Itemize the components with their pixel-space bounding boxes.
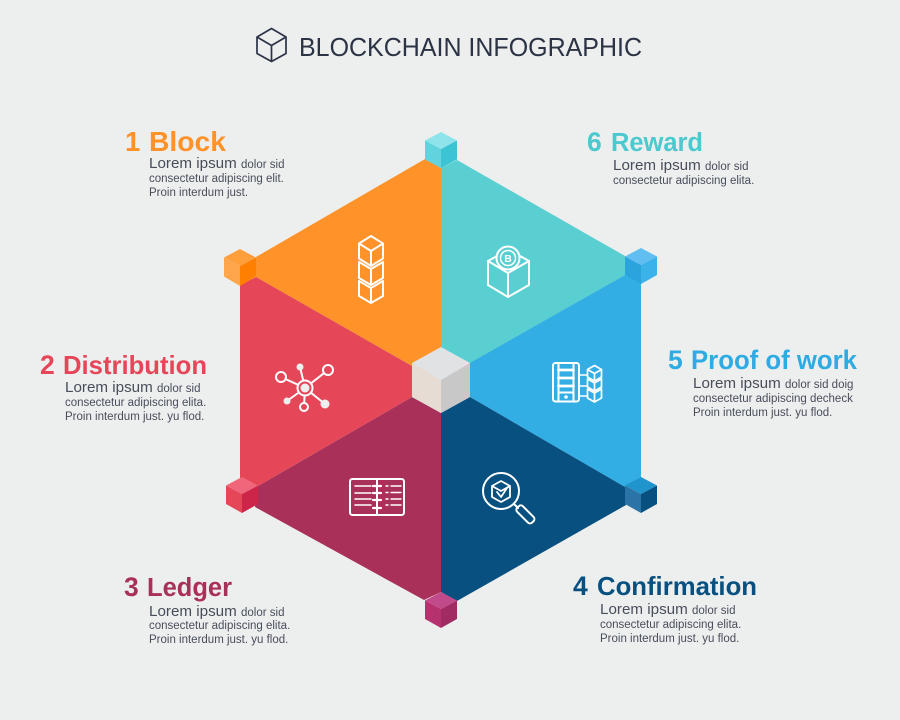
block 2: Distribution: Lorem ipsum dolor sid: [65, 379, 200, 396]
block 2: Distribution: Proin interdum just. yu flod.: [65, 411, 204, 423]
block 3: Ledger: 3: [124, 572, 139, 602]
block 5: Proof of work: Lorem ipsum dolor sid doig: [693, 375, 853, 392]
block 6: Reward: [587, 127, 754, 187]
block 3: Ledger: Ledger: [147, 574, 232, 602]
segment: confirmation: [441, 397, 626, 601]
block 6: Reward: Lorem ipsum dolor sid: [613, 157, 748, 174]
icon: magnifier with checked cube: [483, 473, 536, 525]
block 5: Proof of work: 5: [668, 345, 683, 375]
block 5: Proof of work: Proin interdum just. yu flod.: [693, 407, 832, 419]
icon: server and blocks: [553, 363, 602, 402]
icon: bitcoin box: [488, 246, 529, 297]
segment: reward: [441, 160, 625, 364]
segment: distribution: [240, 277, 412, 487]
corner cube: teal: [425, 132, 457, 168]
block 4: Confirmation: Confirmation: [597, 573, 757, 601]
block 2: Distribution: 2: [40, 350, 55, 380]
block 4: Confirmation: [573, 571, 757, 645]
block 4: Confirmation: 4: [573, 571, 588, 601]
block 1: Block: Proin interdum just.: [149, 187, 248, 199]
block 1: Block: [125, 126, 284, 199]
block 2: Distribution: [40, 350, 207, 423]
corner cube: magenta: [425, 592, 457, 628]
block 1: Block: Lorem ipsum dolor sid: [149, 155, 284, 172]
block 1: Block: Block: [149, 126, 226, 157]
segment: proof of work: [470, 275, 641, 487]
corner cube: dark blue: [625, 477, 657, 513]
block 1: Block: 1: [125, 126, 140, 157]
block 5: Proof of work: Proof of work: [691, 345, 858, 375]
block 5: Proof of work: consectetur adipiscing decheck: [693, 393, 853, 405]
title: [257, 28, 642, 62]
corner cube: orange: [224, 249, 256, 286]
center cube: [412, 347, 470, 413]
block 1: Block: consectetur adipiscing elit.: [149, 173, 284, 185]
block 3: Ledger: [124, 572, 290, 646]
corner cube: blue: [625, 248, 657, 284]
block 4: Confirmation: Lorem ipsum dolor sid: [600, 601, 735, 618]
block 6: Reward: consectetur adipiscing elita.: [613, 175, 754, 187]
icon: network nodes: [276, 364, 333, 411]
corner cube: red: [226, 477, 258, 513]
block 6: Reward: 6: [587, 127, 602, 157]
icon: stacked blocks: [359, 236, 383, 303]
block 6: Reward: Reward: [611, 129, 703, 157]
hexagon chart: [224, 132, 657, 628]
segment: block: [256, 159, 441, 366]
block 2: Distribution: Distribution: [63, 352, 207, 380]
icon: title cube: [257, 28, 286, 62]
block 5: Proof of work: [668, 345, 858, 419]
block 4: Confirmation: Proin interdum just. yu flod.: [600, 633, 739, 645]
icon: bitcoin box: B: [504, 253, 512, 265]
icon: ledger book: [350, 479, 404, 515]
block 3: Ledger: Proin interdum just. yu flod.: [149, 634, 288, 646]
block 4: Confirmation: consectetur adipiscing elita.: [600, 619, 741, 631]
block 3: Ledger: consectetur adipiscing elita.: [149, 620, 290, 632]
segment: ledger: [255, 397, 441, 600]
block 3: Ledger: Lorem ipsum dolor sid: [149, 603, 284, 620]
title text: BLOCKCHAIN INFOGRAPHIC: [299, 32, 642, 62]
block 2: Distribution: consectetur adipiscing elita.: [65, 397, 206, 409]
